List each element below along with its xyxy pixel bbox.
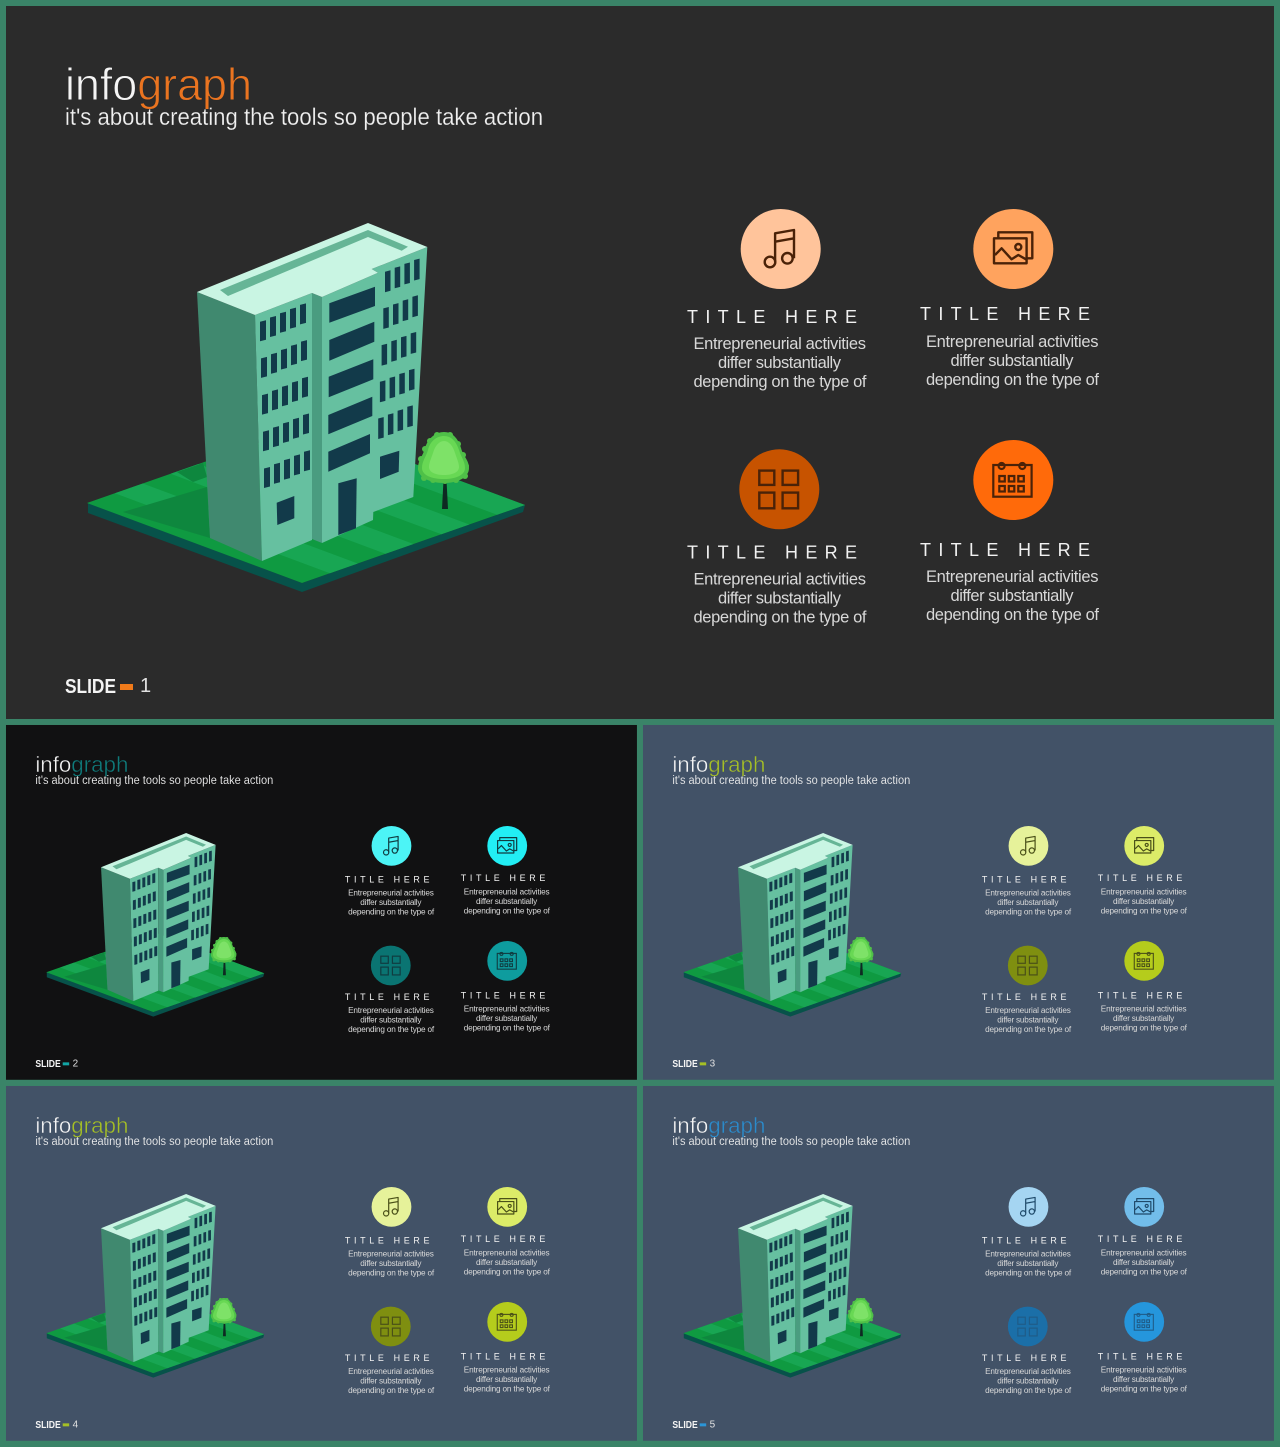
item: calendar: TITLE HERE xyxy=(461,991,545,1001)
item: calendar xyxy=(1098,941,1188,1033)
slide number: 1 xyxy=(140,675,151,697)
item: music: TITLE HERE xyxy=(687,307,857,327)
item: music xyxy=(982,1187,1072,1278)
item: grid xyxy=(345,946,435,1034)
item: music: differ substantially xyxy=(360,1259,422,1268)
item: calendar: TITLE HERE xyxy=(920,540,1090,560)
item: picture xyxy=(461,826,551,916)
illustration: isometric building xyxy=(46,1194,264,1378)
item: calendar: Entrepreneurial activities xyxy=(926,568,1098,586)
item: calendar: depending on the type of xyxy=(464,1024,551,1033)
item: picture: TITLE HERE xyxy=(461,1234,545,1244)
item: music: Entrepreneurial activities xyxy=(985,1250,1071,1259)
item: grid: TITLE HERE xyxy=(982,1353,1066,1363)
illustration: isometric building xyxy=(46,833,264,1017)
item: music: TITLE HERE xyxy=(345,1236,429,1246)
item: grid: differ substantially xyxy=(360,1376,422,1385)
item: picture xyxy=(920,209,1099,389)
title: infograph xyxy=(672,1113,765,1138)
item: music: depending on the type of xyxy=(694,373,867,391)
illustration: isometric building xyxy=(87,223,525,592)
subtitle: it's about creating the tools so people take action xyxy=(65,104,543,131)
item: calendar: depending on the type of xyxy=(464,1385,551,1394)
item: music: depending on the type of xyxy=(348,1269,435,1278)
panel: slide 3 xyxy=(643,725,1274,1080)
item: picture xyxy=(1098,826,1188,916)
slide number: 4 xyxy=(73,1419,79,1430)
item: grid: TITLE HERE xyxy=(345,992,429,1002)
item: calendar: differ substantially xyxy=(1113,1014,1175,1023)
item: calendar xyxy=(920,440,1099,624)
panel: slide 4 xyxy=(6,1086,637,1441)
subtitle: it's about creating the tools so people take action xyxy=(35,1134,273,1148)
item: music: differ substantially xyxy=(360,898,422,907)
item: picture: Entrepreneurial activities xyxy=(1101,1249,1187,1258)
item: grid: depending on the type of xyxy=(694,608,867,626)
illustration: isometric building xyxy=(683,833,901,1017)
item: picture: depending on the type of xyxy=(464,1268,551,1277)
item: music xyxy=(687,209,867,391)
item: music: depending on the type of xyxy=(985,908,1072,917)
item: picture: Entrepreneurial activities xyxy=(926,333,1098,351)
item: calendar: Entrepreneurial activities xyxy=(1101,1005,1187,1014)
item: grid: depending on the type of xyxy=(985,1386,1072,1395)
item: calendar: differ substantially xyxy=(1113,1375,1175,1384)
item: calendar: TITLE HERE xyxy=(461,1352,545,1362)
item: calendar xyxy=(1098,1302,1188,1394)
item: music: TITLE HERE xyxy=(982,875,1066,885)
slide number xyxy=(672,1058,716,1070)
item: picture: depending on the type of xyxy=(926,371,1099,389)
item: picture xyxy=(461,1187,551,1277)
item: grid: differ substantially xyxy=(997,1015,1059,1024)
item: picture: Entrepreneurial activities xyxy=(464,888,550,897)
item: music: TITLE HERE xyxy=(345,875,429,885)
item: calendar: differ substantially xyxy=(476,1375,538,1384)
item: grid xyxy=(982,946,1072,1034)
item: music: Entrepreneurial activities xyxy=(348,1250,434,1259)
title: infograph xyxy=(35,1113,128,1138)
item: picture: TITLE HERE xyxy=(1098,1234,1182,1244)
item: grid: Entrepreneurial activities xyxy=(348,1006,434,1015)
item: picture: differ substantially xyxy=(1113,1258,1175,1267)
item: music xyxy=(982,826,1072,917)
item: grid: Entrepreneurial activities xyxy=(985,1006,1071,1015)
item: picture: depending on the type of xyxy=(1101,907,1188,916)
item: grid xyxy=(345,1307,435,1395)
item: picture: differ substantially xyxy=(950,352,1074,370)
slide number xyxy=(35,1419,79,1431)
item: grid: differ substantially xyxy=(718,590,842,608)
slide number: SLIDE xyxy=(35,1059,61,1070)
item: music: differ substantially xyxy=(997,898,1059,907)
item: grid: differ substantially xyxy=(997,1376,1059,1385)
item: picture: depending on the type of xyxy=(1101,1268,1188,1277)
item: grid: depending on the type of xyxy=(348,1025,435,1034)
item: grid: Entrepreneurial activities xyxy=(694,570,866,588)
subtitle: it's about creating the tools so people take action xyxy=(672,1134,910,1148)
item: grid: TITLE HERE xyxy=(345,1353,429,1363)
item: picture: TITLE HERE xyxy=(1098,873,1182,883)
item: picture: differ substantially xyxy=(1113,897,1175,906)
item: grid: TITLE HERE xyxy=(982,992,1066,1002)
item: calendar: TITLE HERE xyxy=(1098,1352,1182,1362)
item: grid: depending on the type of xyxy=(985,1025,1072,1034)
title: infograph xyxy=(65,59,252,110)
item: music: Entrepreneurial activities xyxy=(348,889,434,898)
item: music: depending on the type of xyxy=(348,908,435,917)
subtitle: it's about creating the tools so people take action xyxy=(672,773,910,787)
item: music: differ substantially xyxy=(997,1259,1059,1268)
item: calendar: depending on the type of xyxy=(926,606,1099,624)
item: music xyxy=(345,826,435,917)
item: picture: differ substantially xyxy=(476,1258,538,1267)
item: calendar: Entrepreneurial activities xyxy=(464,1366,550,1375)
item: picture: TITLE HERE xyxy=(920,304,1090,324)
item: calendar: differ substantially xyxy=(476,1014,538,1023)
panel: slide 5 xyxy=(643,1086,1274,1441)
illustration: isometric building xyxy=(683,1194,901,1378)
item: music: depending on the type of xyxy=(985,1269,1072,1278)
item: grid: Entrepreneurial activities xyxy=(985,1367,1071,1376)
panel: slide 1 xyxy=(6,6,1274,719)
item: picture: depending on the type of xyxy=(464,907,551,916)
item: calendar: differ substantially xyxy=(950,587,1074,605)
item: grid xyxy=(687,449,867,626)
item: music xyxy=(345,1187,435,1278)
item: calendar xyxy=(461,941,551,1033)
item: picture: Entrepreneurial activities xyxy=(1101,888,1187,897)
slide number: SLIDE xyxy=(65,676,116,698)
item: grid: TITLE HERE xyxy=(687,542,857,562)
item: grid: depending on the type of xyxy=(348,1386,435,1395)
slide number xyxy=(672,1419,716,1431)
item: music: Entrepreneurial activities xyxy=(694,335,866,353)
item: picture: TITLE HERE xyxy=(461,873,545,883)
subtitle: it's about creating the tools so people take action xyxy=(35,773,273,787)
panel: slide 2 xyxy=(6,725,637,1080)
item: grid: Entrepreneurial activities xyxy=(348,1367,434,1376)
slide number xyxy=(65,675,151,698)
slide number: 2 xyxy=(73,1058,79,1069)
item: picture xyxy=(1098,1187,1188,1277)
item: music: differ substantially xyxy=(718,354,842,372)
item: calendar: depending on the type of xyxy=(1101,1024,1188,1033)
title: infograph xyxy=(35,752,128,777)
slide number: 3 xyxy=(710,1058,716,1069)
item: music: Entrepreneurial activities xyxy=(985,889,1071,898)
item: grid: differ substantially xyxy=(360,1015,422,1024)
item: calendar: TITLE HERE xyxy=(1098,991,1182,1001)
slide number: SLIDE xyxy=(672,1420,698,1431)
item: calendar: Entrepreneurial activities xyxy=(1101,1366,1187,1375)
item: calendar: Entrepreneurial activities xyxy=(464,1005,550,1014)
item: calendar: depending on the type of xyxy=(1101,1385,1188,1394)
item: grid xyxy=(982,1307,1072,1395)
slide number: SLIDE xyxy=(672,1059,698,1070)
item: picture: differ substantially xyxy=(476,897,538,906)
item: calendar xyxy=(461,1302,551,1394)
title: infograph xyxy=(672,752,765,777)
slide number xyxy=(35,1058,79,1070)
slide number: 5 xyxy=(710,1419,716,1430)
item: picture: Entrepreneurial activities xyxy=(464,1249,550,1258)
slide number: SLIDE xyxy=(35,1420,61,1431)
item: music: TITLE HERE xyxy=(982,1236,1066,1246)
